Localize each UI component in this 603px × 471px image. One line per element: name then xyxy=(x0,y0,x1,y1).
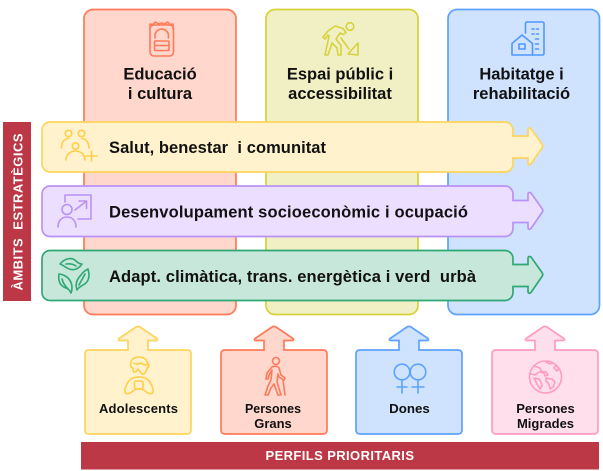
card: Persones Grans xyxy=(221,326,327,434)
panel: Espai públic i accessibilitat xyxy=(266,10,418,314)
banner: Perfils prioritaris xyxy=(81,442,599,470)
card: Dones xyxy=(356,326,462,434)
label: Dones xyxy=(389,401,430,416)
panel: Educació i cultura xyxy=(84,10,236,314)
arrow: Desenvolupament socioeconòmic i ocupació xyxy=(42,186,543,236)
heading: Habitatge i rehabilitació: rehabilitació xyxy=(473,85,570,103)
icon: recycling leaves xyxy=(59,259,89,293)
icon: presenter with growth board xyxy=(58,195,91,227)
label: Adolescents xyxy=(99,401,178,416)
sidebar: Àmbits estratègics: ÀMBITS ESTRATÈGICS xyxy=(10,133,26,290)
banner: Perfils prioritaris: PERFILS PRIORITARIS xyxy=(266,448,414,463)
card: Adolescents xyxy=(85,326,191,434)
icon: worker digging xyxy=(323,23,358,55)
label: Migrades xyxy=(517,416,574,431)
label: Persones xyxy=(245,401,301,416)
icon: teen with phone xyxy=(125,357,153,394)
icon: globe xyxy=(530,361,562,393)
label: Desenvolupament socioeconòmic i ocupació xyxy=(109,204,468,222)
label: Adapt. climàtica, trans. energètica i verd urbà xyxy=(109,268,477,286)
arrow: Adapt. climàtica, trans. energètica i verd urbà xyxy=(42,250,543,300)
icon: two female symbols xyxy=(394,364,426,393)
heading: Espai públic i accessibilitat: accessibilitat xyxy=(288,85,392,103)
icon: buildings and house xyxy=(512,22,544,55)
heading: Educació i cultura: Educació xyxy=(123,66,197,84)
heading: Espai públic i accessibilitat: Espai públic i xyxy=(287,66,393,84)
icon: backpack xyxy=(150,22,174,56)
label: Persones xyxy=(516,401,575,416)
icon: community people plus xyxy=(62,130,97,161)
card: Persones Migrades xyxy=(492,326,598,434)
label: Grans xyxy=(254,416,292,431)
heading: Educació i cultura: i cultura xyxy=(128,85,193,103)
sidebar: Àmbits estratègics xyxy=(3,122,31,301)
arrow: Salut, benestar i comunitat xyxy=(42,122,543,172)
panel: Habitatge i rehabilitació xyxy=(448,10,600,314)
heading: Habitatge i rehabilitació: Habitatge i xyxy=(479,66,564,84)
label: Salut, benestar i comunitat xyxy=(109,139,326,157)
icon: elderly with cane xyxy=(265,358,285,395)
